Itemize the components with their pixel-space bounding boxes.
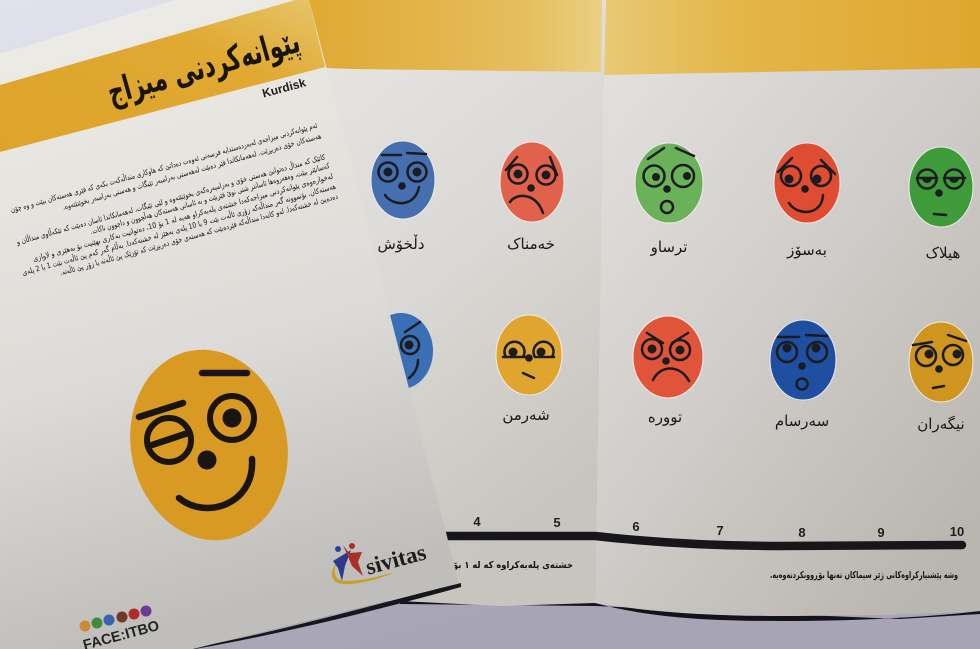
face: happy blue [371,141,435,219]
label: amazed: سەرسام [775,412,829,430]
shadow under folder [400,601,980,621]
logo: sivitas [332,539,429,584]
left yellow band [300,0,602,72]
scale numbers: 9 [877,525,885,540]
body text: هەستەکان. بۆنموونە گەر منداڵەکە زۆری ئاڵەت بێت 9 یا 10 پلەی بەهێز لە خشتەکەدا. بەڵام گەر کەم پێ ئاڵەت بێت 1 یا 2 پلەی [21,181,337,277]
label: shy: شەرمن [502,406,550,424]
scale numbers [473,514,964,540]
title band [0,0,325,152]
scale numbers: 8 [798,525,806,540]
sheet shadow [186,583,461,649]
scale numbers: 7 [716,523,724,538]
body text: دەدەیێ لە خشتەکەدا. لەو کاتەدا منداڵەکە فێردەبێت کە هەستەی خۆی دەربڕێت کە تۆزێک پێ ئاڵەتە یا زۆر پێ ئاڵەتە. [59,191,339,277]
right yellow band [604,0,980,75]
face: caring red [774,143,840,223]
body text: هەستەکان خۆی دەربڕێت. لەهەمانکاتدا فێر دەبێت لەهەستی بەرامبەر تێبگات و هەستی بەرامبەر بخوێنێتەوە. [62,131,322,212]
face: partly hidden blue [369,313,433,389]
panel: front sheet [0,0,461,649]
body text: کەسانێتر ببێت، وەهەروەها ئاسانتر شتی نوێ فێربێت و بە ئاسانی هەستەکان هەڵچوون و داچوون ناکات. [89,160,331,236]
label: worried: نیگەران [917,415,965,433]
scale numbers: 6 [632,519,640,534]
label: tired: هیلاک [926,244,960,262]
folder right page [595,0,980,616]
body text: کاتێک کە منداڵ دەتوانێ هەستی خۆی و بەرامبەرەکەی بخوێنێتەوە و لێی تێبگات، لەهەمانکاتدا ئاسان دەبێت کە تێکەڵاوی منداڵان و [14,151,327,247]
logo: FACE:ITBO [80,606,161,649]
scale numbers: 10 [950,524,964,539]
label: happy: دڵخۆش [378,234,424,253]
sheet paper [0,0,459,649]
scale numbers: 5 [553,515,561,530]
face: angry red [633,316,703,398]
language label: Kurdisk [261,75,308,101]
label: angry: توورە [648,408,682,426]
label: caring: بەسۆز [786,241,827,259]
body text [9,120,339,277]
body text: ئەم پێوانەکردنی میزاجەی لەبەردەستدایە فرسەتی ئەوەت دەداتێ کە هاوکاری منداڵەکەت بکەی کە فێری هەستەکان ببێت و وە چۆن [9,120,318,214]
logo: sivitas: sivitas [363,539,429,580]
scale numbers: 4 [473,514,481,529]
body text: لەخوارەوەی پێوانەکردنی میزاجەکەدا خشتەی پلەبەکراو هەیە لە 1 بۆ 10، دەتوانیت بەکاری بهێنیت بۆ بەهێزی و لاوازی [32,172,334,263]
face: tired green [909,147,973,227]
label: scared: ترساو [650,238,687,256]
face: scared green [635,143,703,223]
label: sad: خەمناک [507,235,555,253]
icon: large winking face [113,335,305,555]
folder left page [300,0,605,606]
panel: open folder behind [300,0,980,621]
caption: scale note: خشتەی پلەبەکراوە کە لە ١ بۆ [452,560,573,571]
face: worried yellow [909,322,973,402]
face: sad red [500,142,564,222]
face: shy yellow [496,315,562,395]
scale bar [430,514,964,546]
face: amazed blue [770,320,836,400]
